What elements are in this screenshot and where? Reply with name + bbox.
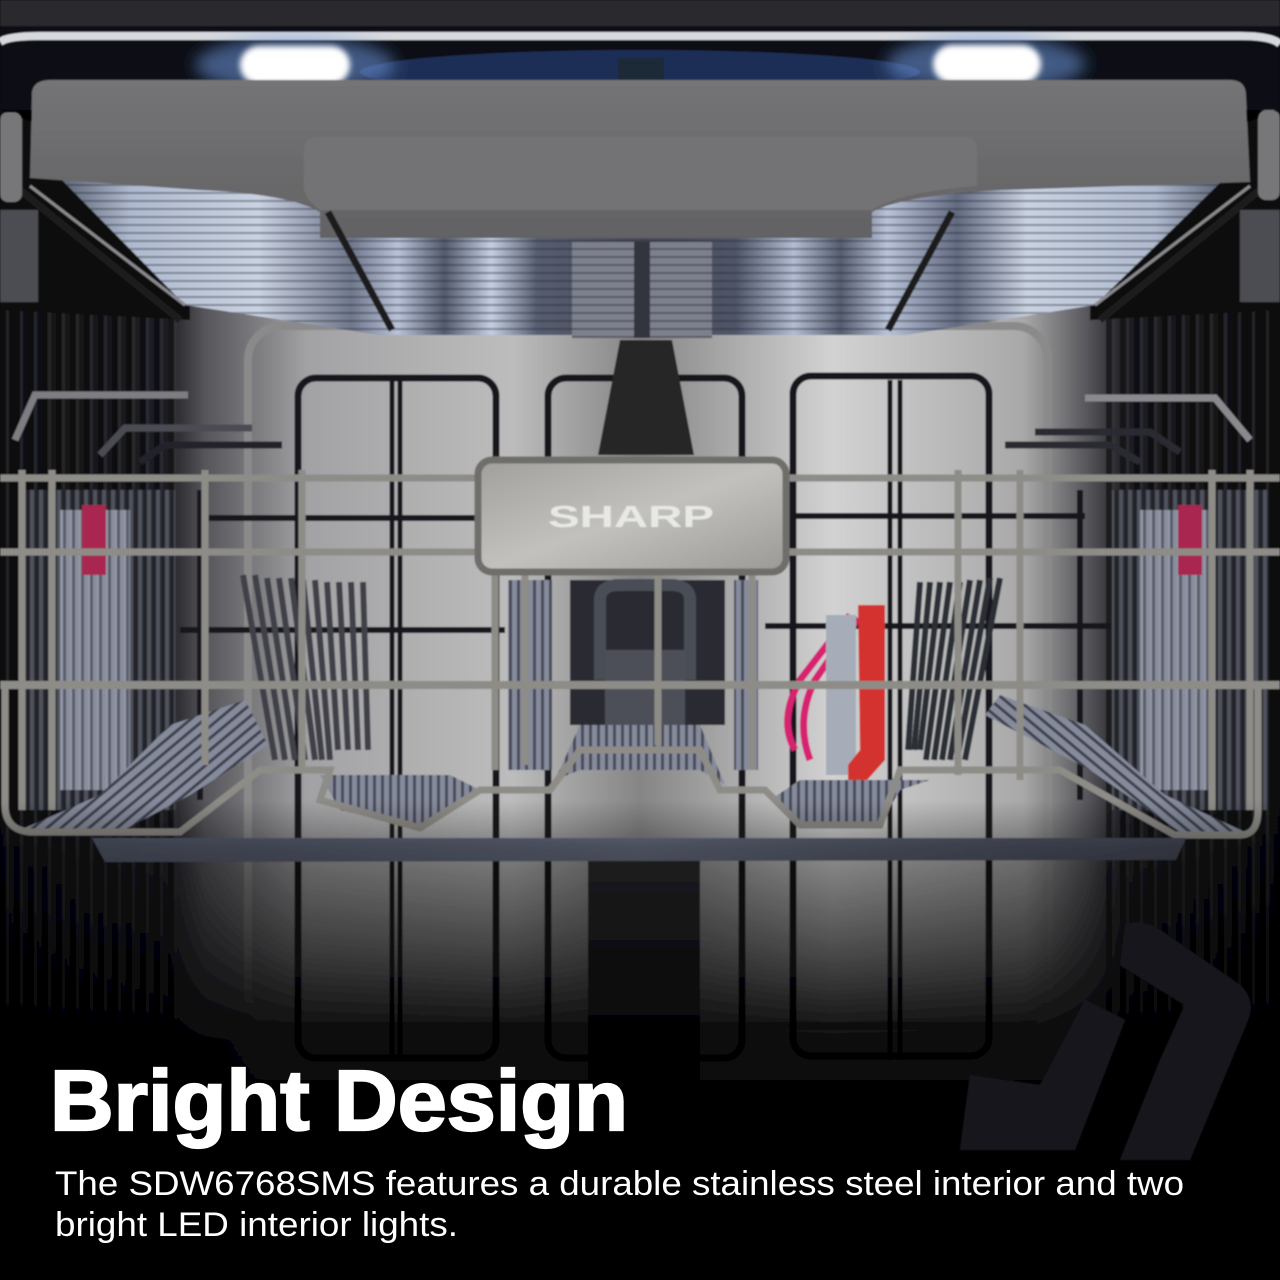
rack frame xyxy=(0,470,1280,835)
side baskets xyxy=(0,210,1280,302)
centre spray arm support xyxy=(598,340,694,455)
logo: SHARP: SHARP xyxy=(548,499,714,534)
bottom darkening xyxy=(0,800,1280,1280)
fan recess xyxy=(360,50,920,94)
body text: The SDW6768SMS features a durable stainless steel interior and two xyxy=(55,1165,1184,1203)
dark centre column below rack xyxy=(588,860,700,1080)
upper rack slats xyxy=(60,178,1225,338)
back wall: upper rack reflections xyxy=(180,376,1115,1060)
centre tines xyxy=(508,580,758,770)
lower spray parts xyxy=(570,580,725,725)
side walls: dark wire stripes xyxy=(0,300,1280,1020)
upper rack tray xyxy=(30,80,1250,238)
tray centre panel xyxy=(303,137,977,210)
right tines xyxy=(908,578,1000,760)
body text: bright LED interior lights. xyxy=(55,1206,458,1244)
side shadow beneath tray xyxy=(0,110,1280,320)
side brackets xyxy=(0,110,1280,202)
left cup handles xyxy=(15,395,282,462)
icon: left LED light xyxy=(195,37,395,93)
right side detail xyxy=(1112,490,1267,810)
dark handle lower right xyxy=(960,922,1251,1160)
left tines xyxy=(243,575,368,760)
right cup handles xyxy=(1005,398,1250,462)
red clip xyxy=(788,605,885,788)
left side detail xyxy=(20,490,175,810)
top cavity xyxy=(0,0,1280,110)
logo plate xyxy=(478,460,786,572)
heading: Bright Design xyxy=(50,1054,628,1149)
top strip xyxy=(0,0,1280,26)
top rail xyxy=(0,36,1280,44)
back wall: stainless steel xyxy=(0,300,1280,1080)
lower rack floor wires xyxy=(20,695,1245,832)
back wall: embossed outline xyxy=(248,326,1048,1026)
icon: right LED light xyxy=(886,36,1086,92)
body text xyxy=(55,1165,1184,1244)
tray side struts xyxy=(20,186,1260,330)
lower shelf xyxy=(92,838,1186,862)
